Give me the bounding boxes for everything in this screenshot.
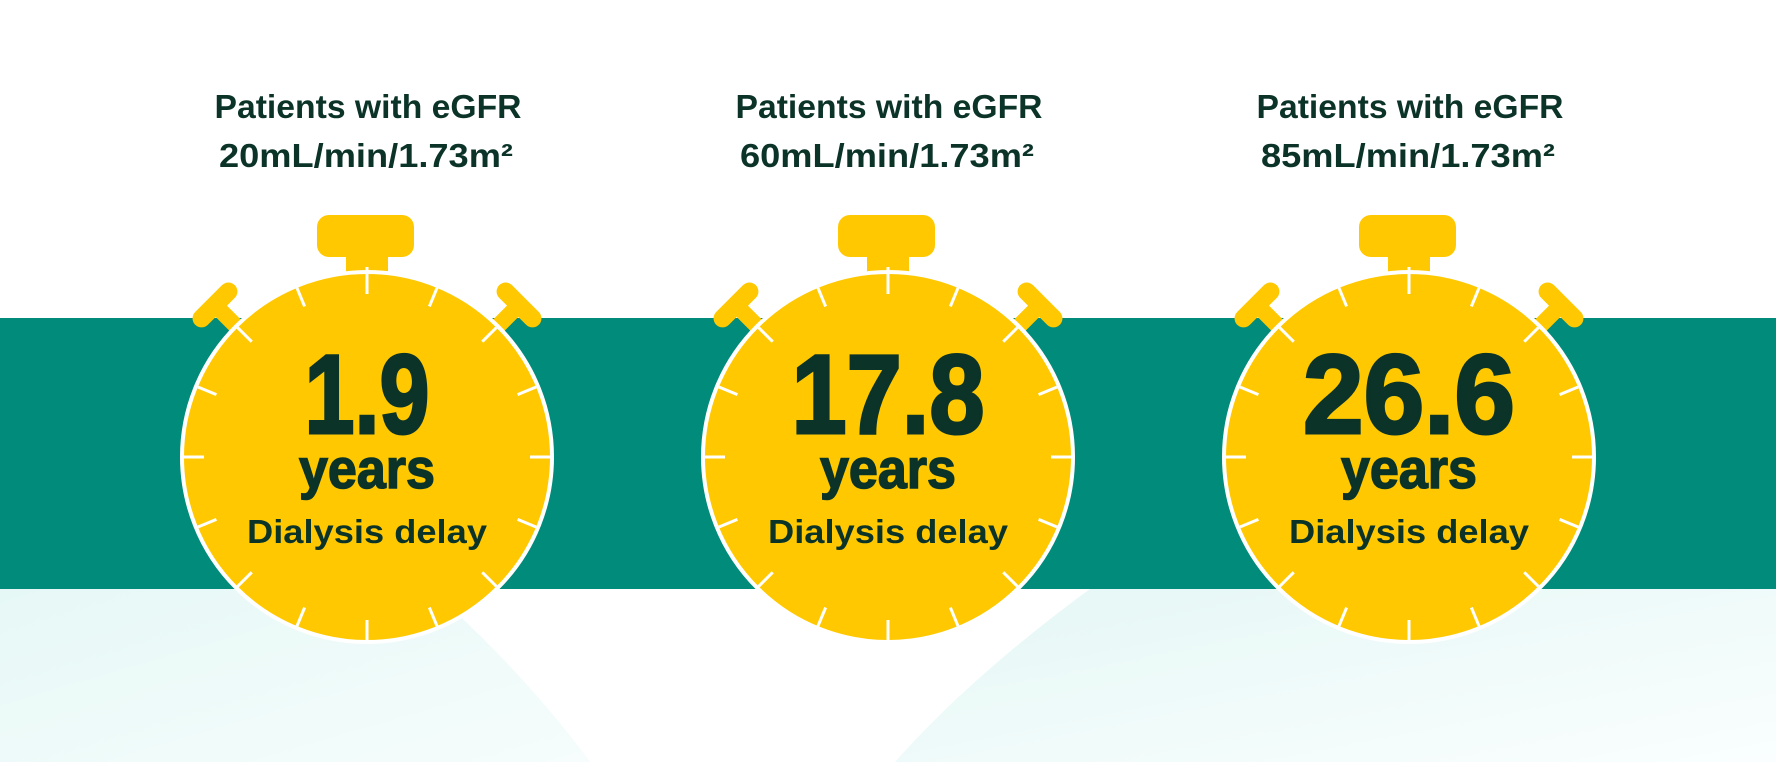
icon: stopwatch 1.9 years: 1.9: [304, 332, 430, 457]
icon: stopwatch 26.6 years: [1224, 215, 1594, 642]
heading: eGFR 20: [214, 88, 522, 174]
panel: eGFR 60: [703, 88, 1073, 642]
icon: stopwatch 26.6 years: years: [1341, 437, 1477, 500]
heading: eGFR 60: 60mL/min/1.73m²: [740, 137, 1034, 174]
icon: stopwatch 1.9 years: Dialysis delay: [247, 513, 488, 550]
heading: eGFR 85: [1256, 88, 1564, 174]
background shape: right light teal: [895, 589, 1776, 762]
heading: eGFR 20: Patients with eGFR: [214, 88, 522, 125]
panel: eGFR 85: [1224, 88, 1594, 642]
icon: stopwatch 17.8 years: Dialysis delay: [768, 513, 1009, 550]
green band: [0, 318, 1776, 589]
heading: eGFR 60: [736, 88, 1043, 174]
icon: stopwatch 26.6 years: Dialysis delay: [1289, 513, 1530, 550]
icon: stopwatch 17.8 years: [703, 215, 1073, 642]
heading: eGFR 85: Patients with eGFR: [1256, 88, 1564, 125]
icon: stopwatch 26.6 years: 26.6: [1303, 332, 1515, 457]
background shape: left light teal: [0, 589, 590, 762]
panel: eGFR 20: [182, 88, 552, 642]
heading: eGFR 20: 20mL/min/1.73m²: [219, 137, 513, 174]
heading: eGFR 85: 85mL/min/1.73m²: [1261, 137, 1555, 174]
heading: eGFR 60: Patients with eGFR: [736, 88, 1043, 125]
icon: stopwatch 17.8 years: years: [820, 437, 956, 500]
icon: stopwatch 17.8 years: 17.8: [792, 332, 984, 457]
icon: stopwatch 1.9 years: [182, 215, 552, 642]
icon: stopwatch 1.9 years: years: [299, 437, 435, 500]
